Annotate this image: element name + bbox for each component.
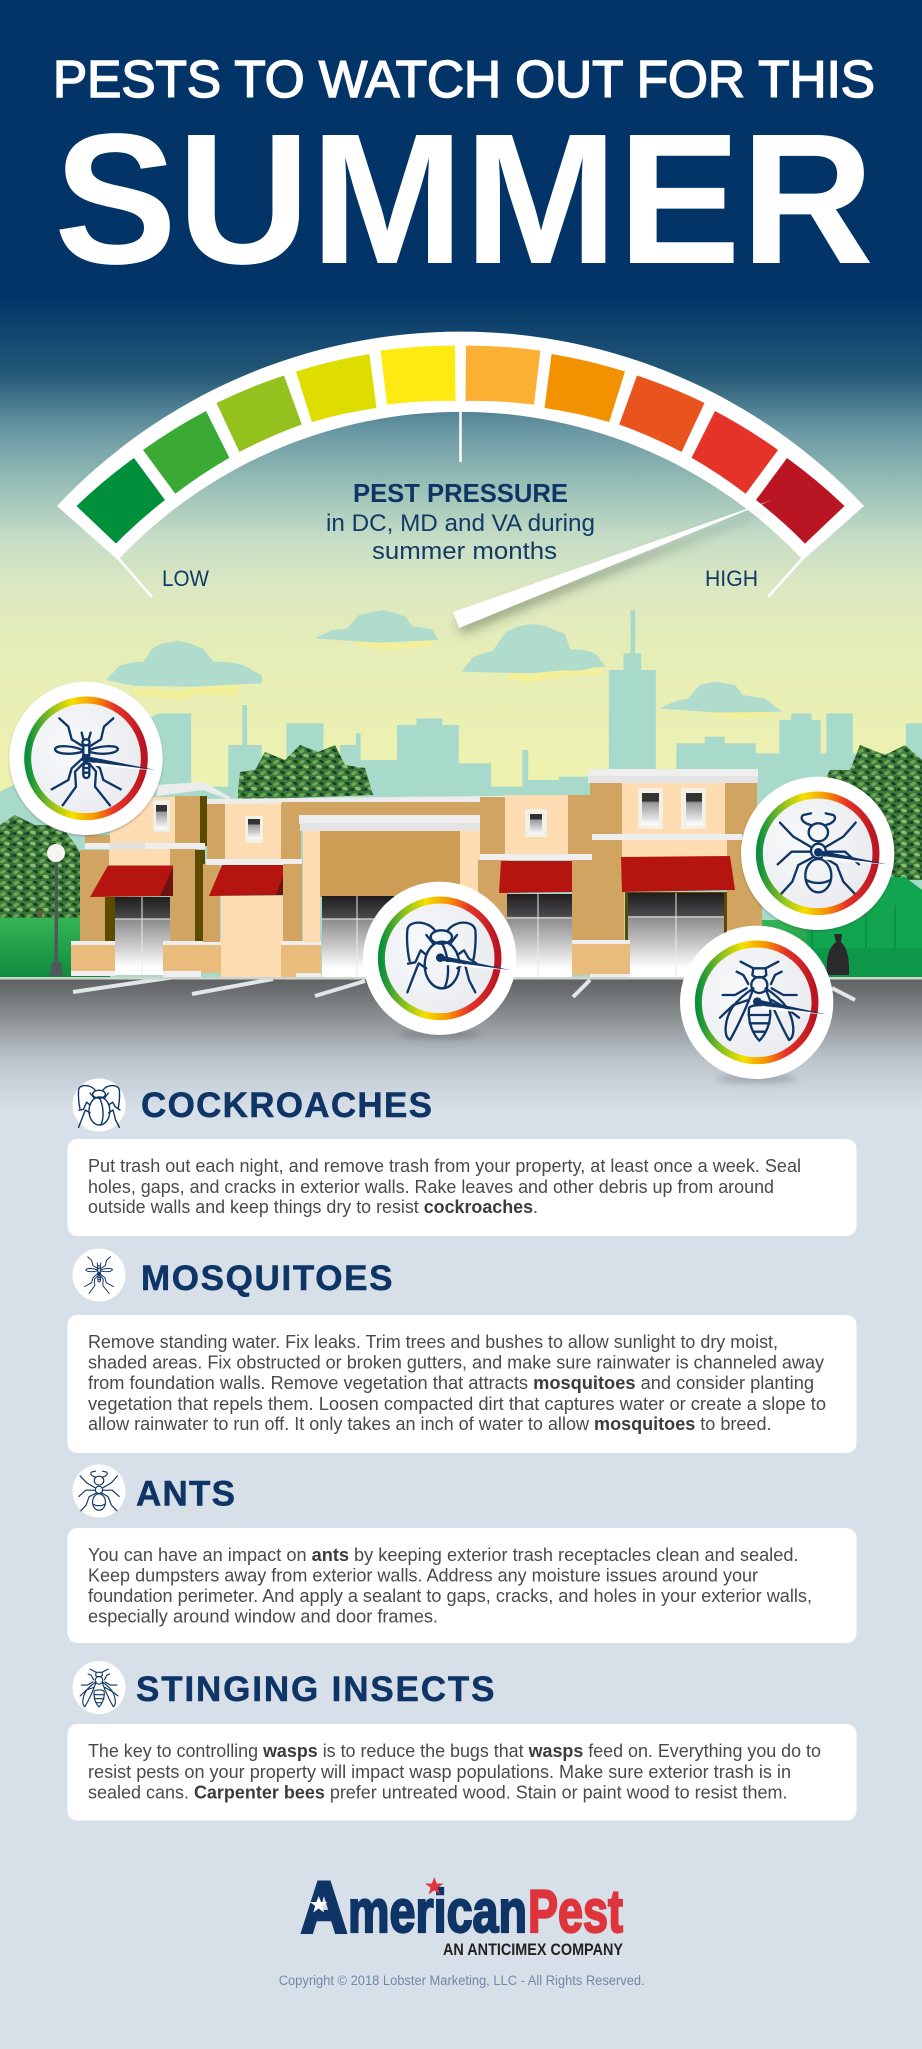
card: stinging insects: The key to controlling wasps is to reduce the bugs that wasps feed on. Everything you do to	[88, 1741, 821, 1761]
card: ants: foundation perimeter. And apply a sealant to gaps, cracks, and holes in your exterior walls,	[88, 1586, 812, 1606]
parking lines	[73, 977, 855, 1000]
lamp post	[47, 844, 65, 976]
card: mosquitoes	[68, 1315, 856, 1453]
copyright: Copyright © 2018 Lobster Marketing, LLC - All Rights Reserved.	[279, 1973, 645, 1988]
icon: mosquito	[72, 1248, 126, 1302]
card: cockroaches: Put trash out each night, and remove trash from your property, at least once a week. Seal	[88, 1156, 801, 1176]
icon: cockroach	[72, 1078, 126, 1132]
gauge caption: summer months	[372, 538, 557, 565]
card: cockroaches	[68, 1139, 856, 1236]
middle-right section	[478, 795, 592, 977]
section: ants	[68, 1464, 856, 1643]
heading: stinging insects: STINGING INSECTS	[136, 1670, 494, 1709]
low label: LOW	[162, 566, 209, 591]
magnifier: wasp	[680, 926, 833, 1083]
parking lot ground	[0, 978, 922, 1110]
logo: American Pest: A	[301, 1868, 347, 1948]
icon: red star	[425, 1877, 444, 1894]
magnifier: mosquito	[9, 682, 163, 835]
card: ants	[68, 1528, 856, 1643]
center portico	[282, 802, 482, 977]
card: mosquitoes: Remove standing water. Fix leaks. Trim trees and bushes to allow sunlight to dry moist,	[88, 1332, 778, 1352]
card: stinging insects: sealed cans. Carpenter bees prefer untreated wood. Stain or paint wood to resist them.	[88, 1782, 788, 1802]
section: mosquitoes	[68, 1248, 856, 1453]
gauge caption: PEST PRESSURE	[353, 478, 568, 508]
gauge	[57, 332, 864, 628]
card: mosquitoes: shaded areas. Fix obstructed or broken gutters, and make sure rainwater is channeled away	[88, 1352, 824, 1372]
card: mosquitoes: vegetation that repels them. Loosen compacted dirt that captures water or create a slope to	[88, 1394, 826, 1414]
card: ants: You can have an impact on ants by keeping exterior trash receptacles clean and sealed.	[88, 1545, 798, 1565]
card: ants: Keep dumpsters away from exterior walls. Address any moisture issues around your	[88, 1566, 758, 1586]
sky gradient background	[0, 0, 922, 980]
roof line	[207, 795, 590, 804]
magnifier: cockroach	[363, 882, 516, 1038]
shopping center building	[0, 769, 922, 980]
logo: American Pest	[301, 1868, 623, 1948]
card: ants: especially around window and door frames.	[88, 1606, 438, 1626]
icon: wasp	[72, 1661, 126, 1714]
gauge ticks	[118, 412, 803, 597]
card: cockroaches: holes, gaps, and cracks in exterior walls. Rake leaves and other debris up from around	[88, 1177, 774, 1197]
magnifier: ant	[741, 777, 894, 930]
high label: HIGH	[705, 566, 758, 591]
gauge white band	[57, 332, 864, 560]
middle-left section	[203, 802, 321, 978]
card: mosquitoes: from foundation walls. Remove vegetation that attracts mosquitoes and consider planting	[88, 1373, 814, 1393]
logo: American Pest: merican	[348, 1878, 527, 1945]
skyline and clouds background	[0, 610, 922, 987]
gauge needle	[453, 500, 772, 628]
gauge caption	[326, 478, 595, 565]
heading: cockroaches: COCKROACHES	[141, 1086, 432, 1125]
icon: white star	[310, 1896, 328, 1912]
section: stinging insects	[68, 1661, 856, 1820]
title: PESTS TO WATCH OUT FOR THIS	[53, 51, 875, 109]
card: stinging insects	[68, 1724, 856, 1820]
heading: ants: ANTS	[136, 1474, 235, 1514]
logo: American Pest: Pest	[528, 1878, 623, 1945]
right tower	[572, 769, 762, 978]
lawn and dumpster enclosure	[0, 877, 922, 978]
card: stinging insects: resist pests on your property will impact wasp populations. Make sure exterior trash is in	[88, 1762, 791, 1782]
trees behind building	[0, 745, 922, 960]
gauge segments	[76, 346, 844, 544]
left wing	[71, 782, 230, 977]
heading: mosquitoes: MOSQUITOES	[141, 1259, 392, 1298]
card: mosquitoes: allow rainwater to run off. It only takes an inch of water to allow mosquitoes to breed.	[88, 1414, 771, 1434]
logo tagline: AN ANTICIMEX COMPANY	[443, 1941, 623, 1959]
section: cockroaches	[68, 1078, 856, 1236]
gauge caption: in DC, MD and VA during	[326, 510, 595, 537]
card: cockroaches: outside walls and keep things dry to resist cockroaches.	[88, 1197, 538, 1217]
title: SUMMER	[54, 96, 874, 303]
icon: ant	[72, 1464, 126, 1518]
